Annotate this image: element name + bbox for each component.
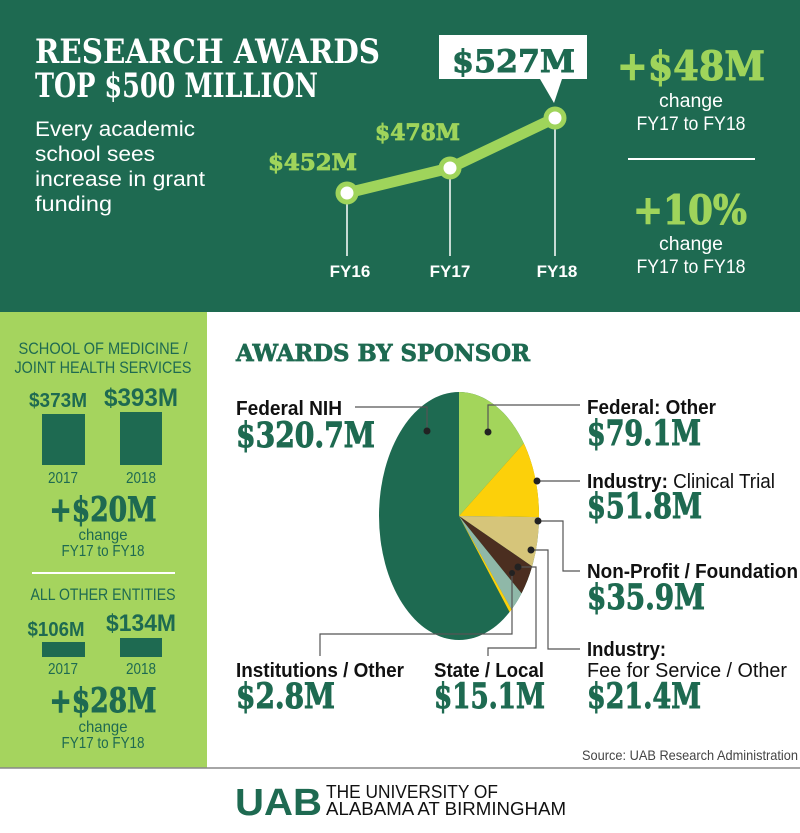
subtitle: funding [35, 193, 112, 216]
heading: awards by sponsor: AWARDS BY SPONSOR [235, 340, 531, 367]
heading: school of medicine [14, 339, 192, 377]
label: Industry Fee for Service [587, 639, 787, 717]
heading: school of medicine: JOINT HEALTH SERVICES [14, 358, 192, 377]
label: Institutions: Institutions / Other [236, 660, 404, 682]
bar chart: other entities: $106M [28, 619, 84, 641]
label: Industry Fee for Service: Fee for Service / Other [587, 660, 787, 682]
panel: top header [0, 0, 800, 312]
subtitle [35, 118, 205, 216]
stat: +10%: +10% [633, 187, 747, 234]
label: Non-Profit: $35.9M [587, 577, 705, 618]
footer logo: ALABAMA AT BIRMINGHAM [326, 799, 566, 819]
stat: +$28M [50, 681, 156, 752]
label: State Local: State / Local [434, 660, 544, 682]
label: Federal NIH [236, 398, 375, 456]
line chart: $478M [375, 120, 460, 146]
line chart: FY17 [430, 262, 470, 281]
label: Industry Clinical Trial: Industry: Clinical Trial [587, 471, 775, 493]
bar chart: other entities: 2018 [126, 661, 156, 678]
label: Institutions [236, 660, 404, 717]
heading: all other entities: ALL OTHER ENTITIES [30, 585, 176, 604]
line chart: FY18 [537, 262, 577, 281]
pie chart [379, 392, 539, 640]
bar chart: school of medicine: $373M [29, 390, 87, 412]
stat: +$28M: FY17 to FY18 [62, 735, 145, 752]
stat: +10%: FY17 to FY18 [636, 257, 746, 278]
stat: +$48M: +$48M [617, 43, 765, 90]
stat: +$48M [617, 43, 765, 135]
label: Industry Clinical Trial: $51.8M [587, 486, 702, 527]
bar chart: other entities: 2017 [48, 661, 78, 678]
stat: +$20M: FY17 to FY18 [62, 543, 145, 560]
stat: +$20M: change [78, 527, 128, 544]
heading: school of medicine: SCHOOL OF MEDICINE / [18, 339, 188, 358]
callout: $527M [439, 35, 587, 103]
line chart: $452M [268, 150, 357, 176]
line chart: FY16 [330, 262, 370, 281]
bar chart: school of medicine [29, 384, 178, 487]
stat: +$48M: change [659, 91, 723, 112]
stat: +$20M: +$20M [50, 490, 156, 530]
title: TOP $500 MILLION [35, 66, 318, 106]
label: State Local [434, 660, 545, 717]
label: Industry Fee for Service: $21.4M [587, 676, 701, 717]
line chart [268, 109, 577, 281]
label: State Local: $15.1M [434, 676, 545, 717]
label: Federal NIH: $320.7M [236, 415, 375, 456]
label: Federal Other [587, 397, 716, 454]
title [35, 32, 380, 106]
stat: +$48M: FY17 to FY18 [636, 114, 746, 135]
label: Federal Other: $79.1M [587, 413, 701, 454]
bar chart: other entities: $134M [106, 610, 176, 637]
stat: +10%: change [659, 234, 723, 255]
stat: +$28M: change [78, 719, 128, 736]
label: Industry Clinical Trial [587, 471, 775, 527]
bar chart: other entities [28, 610, 176, 678]
label: Federal Other: Federal: Other [587, 397, 716, 419]
footer logo [235, 782, 566, 824]
footer logo: UAB [235, 782, 322, 824]
footer logo: THE UNIVERSITY OF [326, 782, 498, 802]
bar chart: school of medicine: 2018 [126, 470, 156, 487]
leader lines [320, 405, 580, 656]
label: Non-Profit [587, 561, 798, 618]
subtitle: school sees [35, 143, 155, 166]
subtitle: increase in grant [35, 168, 205, 191]
bar chart: school of medicine: $393M [104, 384, 178, 412]
bar chart: school of medicine: 2017 [48, 470, 78, 487]
stat: +$20M [50, 490, 156, 560]
title: RESEARCH AWARDS [35, 32, 380, 72]
label: Institutions: $2.8M [236, 676, 335, 717]
panel: left entities [0, 312, 207, 768]
stat: +$28M: +$28M [50, 681, 156, 721]
label: Federal NIH: Federal NIH [236, 398, 342, 420]
subtitle: Every academic [35, 118, 195, 141]
callout: $527M: $527M [452, 44, 575, 80]
label: Industry Fee for Service: Industry: [587, 639, 666, 661]
stat: +10% [633, 187, 747, 278]
